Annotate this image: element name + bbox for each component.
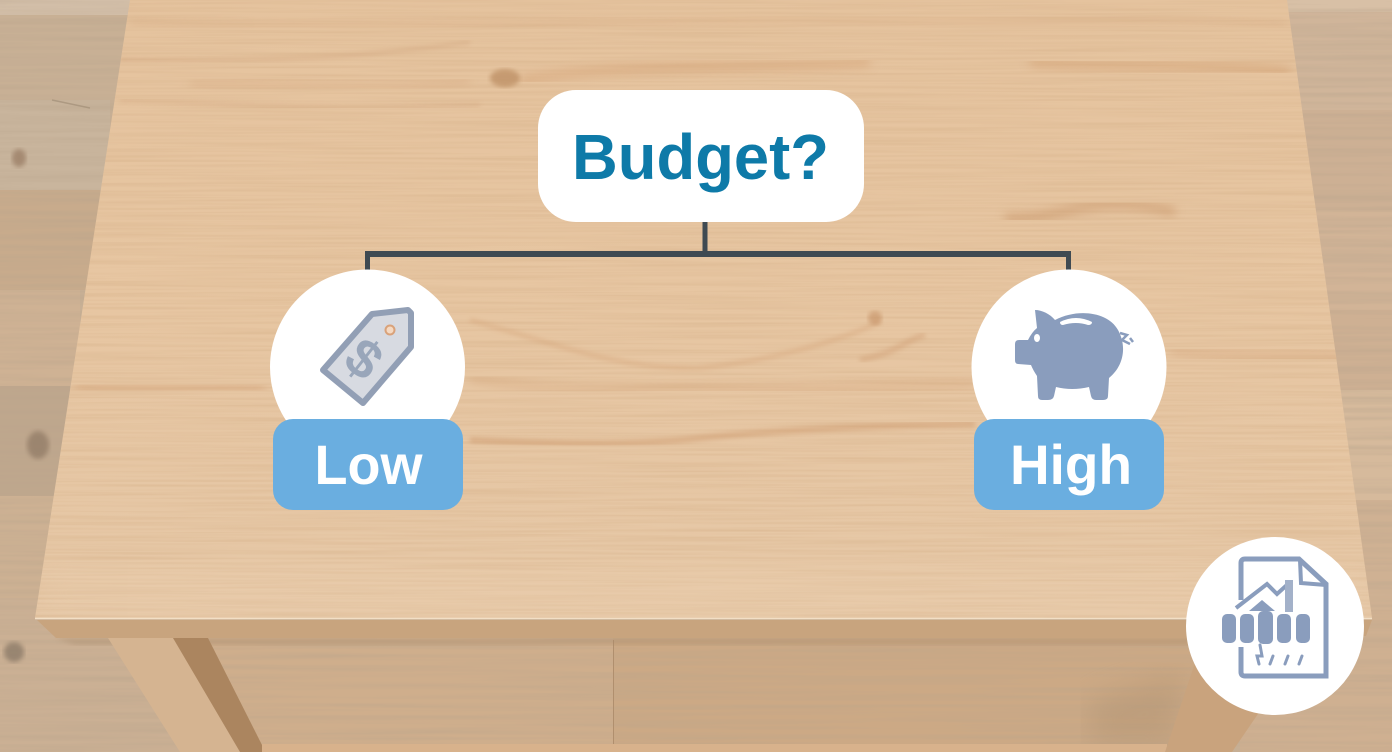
- label: High: High: [1010, 433, 1132, 496]
- shadow under table: [55, 638, 1190, 645]
- option: Low: [270, 270, 465, 510]
- table front edge: [37, 620, 1372, 638]
- table leg: left: [108, 638, 262, 752]
- decision node: Budget?: [538, 90, 864, 222]
- icon: price tag: $: [333, 326, 394, 392]
- option: High: [972, 270, 1166, 510]
- connector lines: [365, 222, 1071, 271]
- icon: price tag: [323, 310, 411, 403]
- shadow corner on floor: [1098, 685, 1174, 735]
- icon: document with chart: [1222, 559, 1326, 676]
- icon: piggy bank: [1015, 310, 1133, 400]
- heading: Budget?: Budget?: [572, 121, 829, 193]
- label: Low: Low: [314, 433, 423, 496]
- badge: report icon: [1186, 537, 1364, 715]
- table leg: right: [1165, 660, 1262, 752]
